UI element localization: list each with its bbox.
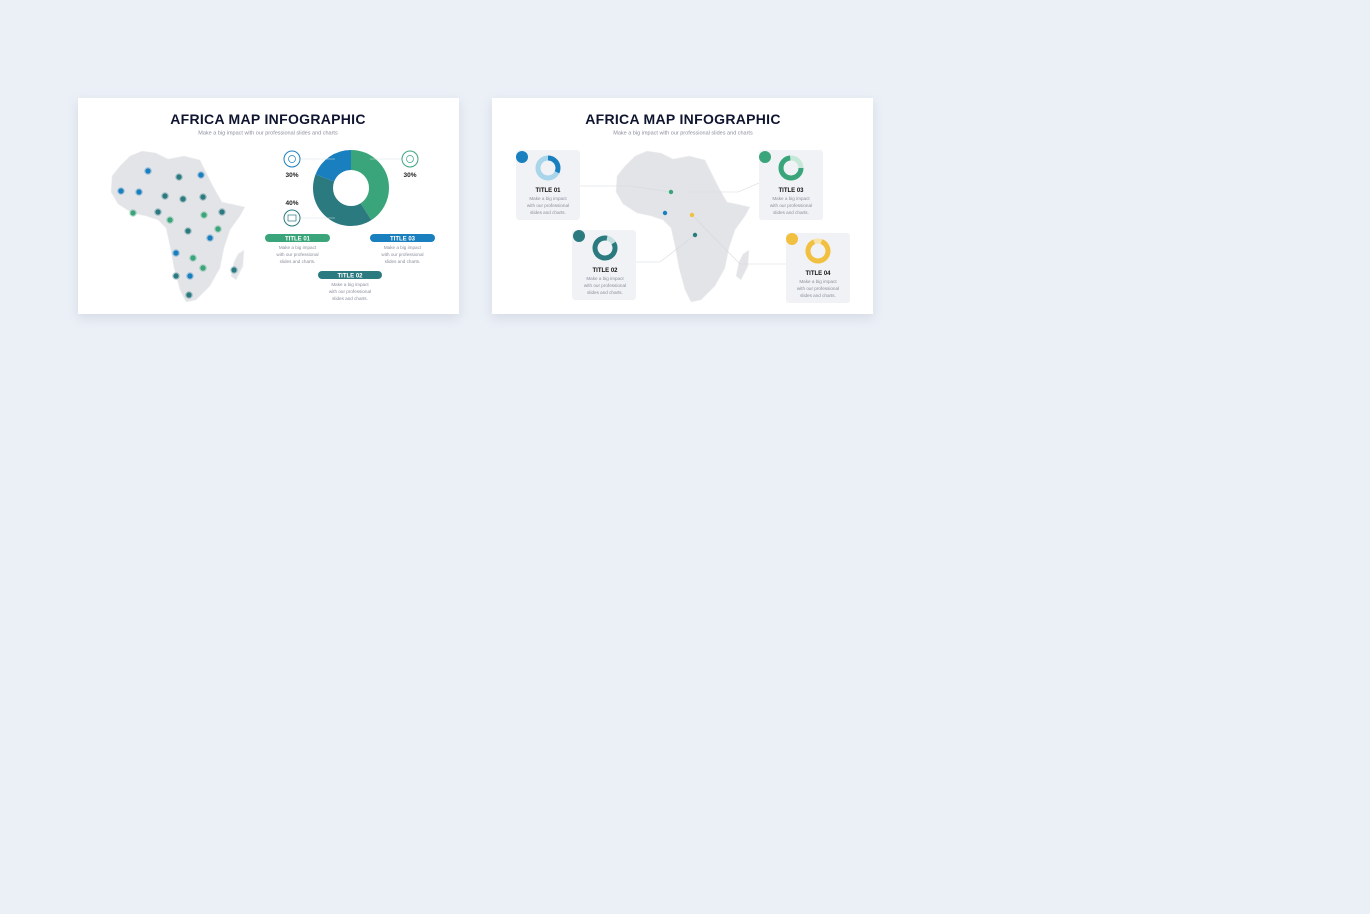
card: title 01: with our professional — [527, 203, 569, 208]
label: title 02: slides and charts. — [332, 296, 368, 301]
card: title 04: TITLE 04 — [805, 271, 831, 277]
subtitle: Make a big impact with our professional slides and charts — [198, 130, 338, 136]
label: title 02: Make a big impact — [331, 282, 369, 287]
label: title 01: Make a big impact — [279, 245, 317, 250]
panel: slide 2 — [492, 98, 873, 314]
donut chart — [323, 160, 379, 216]
label: title 03: with our professional — [381, 252, 424, 257]
card: title 02: with our professional — [584, 283, 626, 288]
card: title 04: with our professional — [797, 286, 839, 291]
card: title 03: slides and charts. — [773, 210, 809, 215]
map: africa with markers — [111, 151, 245, 302]
card: title 01: slides and charts. — [530, 210, 566, 215]
card: title 01: TITLE 01 — [535, 188, 561, 194]
icon: 30% right — [402, 151, 418, 179]
card: title 02: slides and charts. — [587, 290, 623, 295]
label: title 02: with our professional — [329, 289, 371, 294]
card: title 02: TITLE 02 — [592, 268, 618, 274]
card: title 04 — [786, 233, 850, 303]
label: title 03: TITLE 03 — [390, 236, 416, 242]
card: title 01: Make a big impact — [529, 196, 567, 201]
label: title 02: TITLE 02 — [337, 273, 363, 279]
label: title 01: TITLE 01 — [285, 236, 311, 242]
label: title 03: Make a big impact — [384, 245, 422, 250]
subtitle: Make a big impact with our professional slides and charts — [613, 130, 753, 136]
title: AFRICA MAP INFOGRAPHIC — [585, 111, 781, 127]
card: title 03: TITLE 03 — [778, 188, 804, 194]
card: title 04: slides and charts. — [800, 293, 836, 298]
label: title 01: slides and charts. — [280, 259, 315, 264]
icon: 40% — [284, 200, 300, 226]
icon: 30% right: 30% — [403, 172, 417, 179]
title: AFRICA MAP INFOGRAPHIC — [170, 111, 366, 127]
icon: 30% left: 30% — [285, 172, 299, 179]
label: title 03 — [370, 234, 435, 264]
icon connectors — [300, 159, 402, 218]
icon: 40%: 40% — [285, 200, 299, 207]
card: title 02 — [572, 230, 636, 300]
card: title 03: with our professional — [770, 203, 812, 208]
label: title 01 — [265, 234, 330, 264]
card: title 03: Make a big impact — [772, 196, 810, 201]
card: title 04: Make a big impact — [799, 279, 837, 284]
panel: slide 1 — [78, 98, 459, 314]
connectors — [580, 183, 786, 264]
map: africa — [616, 151, 750, 302]
label: title 01: with our professional — [276, 252, 319, 257]
card: title 01 — [516, 150, 580, 220]
icon: 30% left — [284, 151, 300, 179]
label: title 02 — [318, 271, 382, 301]
card: title 02: Make a big impact — [586, 276, 624, 281]
map markers — [663, 190, 697, 237]
card: title 03 — [759, 150, 823, 220]
label: title 03: slides and charts. — [385, 259, 420, 264]
